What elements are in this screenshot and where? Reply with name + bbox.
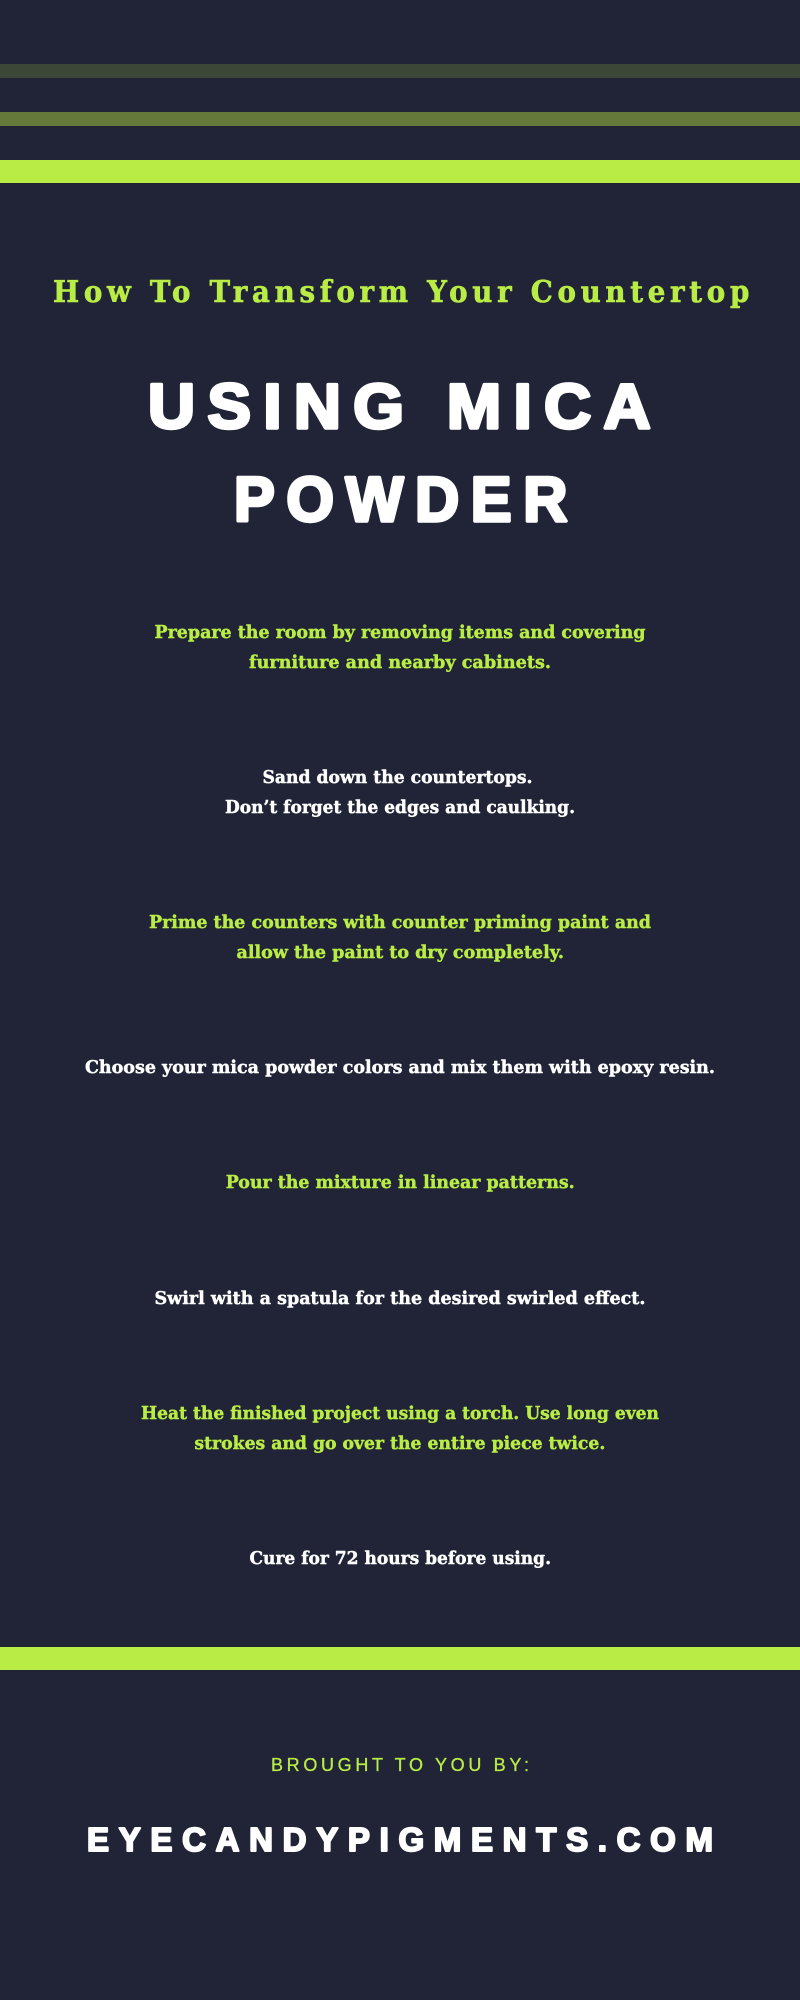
subtitle: How To Transform Your Countertop xyxy=(53,274,754,309)
main title xyxy=(148,372,663,535)
step 2: Sand down the countertops. xyxy=(262,767,532,788)
step 6: Swirl with a spatula for the desired swirled effect. xyxy=(154,1288,646,1309)
website: EYECANDYPIGMENTS.COM xyxy=(87,1821,713,1858)
main title: POWDER xyxy=(234,465,579,535)
step 1: furniture and nearby cabinets. xyxy=(249,652,551,673)
step 7 xyxy=(141,1403,659,1454)
step 7: strokes and go over the entire piece twice. xyxy=(194,1433,605,1454)
step 4: Choose your mica powder colors and mix them with epoxy resin. xyxy=(85,1057,715,1078)
step 2: Don’t forget the edges and caulking. xyxy=(225,797,575,818)
step 3: Prime the counters with counter priming paint and xyxy=(149,912,651,933)
step 8: Cure for 72 hours before using. xyxy=(250,1548,551,1569)
step 3: allow the paint to dry completely. xyxy=(236,942,564,963)
step 5: Pour the mixture in linear patterns. xyxy=(226,1172,575,1193)
step 2 xyxy=(225,767,575,818)
top stripes xyxy=(0,64,800,183)
step 3 xyxy=(149,912,651,963)
main title: USING MICA xyxy=(148,372,663,442)
bottom stripe xyxy=(0,1647,800,1670)
brought to you by: BROUGHT TO YOU BY: xyxy=(271,1755,529,1775)
step 1: Prepare the room by removing items and covering xyxy=(154,622,646,643)
step 1 xyxy=(154,622,646,673)
step 7: Heat the finished project using a torch. Use long even xyxy=(141,1403,659,1424)
